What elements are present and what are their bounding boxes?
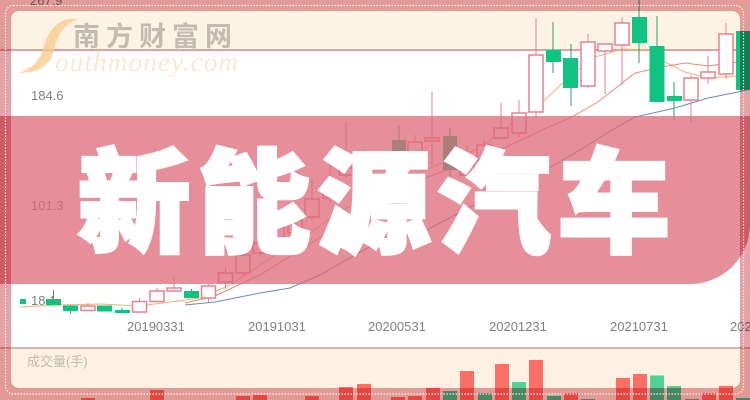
title: 新能源汽车 [78, 142, 670, 267]
axis labels: 184.6 [31, 88, 64, 103]
upper cream chart band [0, 0, 750, 51]
axis labels: 20201231 [489, 319, 547, 334]
title band [0, 116, 750, 284]
axis labels: 18.1 [31, 293, 56, 308]
watermark chinese name: 南方财富网 [73, 21, 238, 52]
axis labels: 20200531 [368, 319, 426, 334]
moving average lines [20, 49, 750, 307]
candlesticks: falling [20, 0, 750, 314]
axis labels: 20191031 [248, 319, 306, 334]
lower cream volume band [0, 347, 750, 400]
volume bars: falling [443, 376, 750, 400]
watermark: southmoney logo [18, 19, 239, 77]
axis labels: 20210731 [610, 319, 668, 334]
axis labels: 101.3 [31, 198, 64, 213]
volume bars: rising [81, 360, 733, 400]
icon: swoosh S [18, 19, 78, 73]
watermark latin name: outhmoney.com [55, 47, 239, 77]
axis labels: 20190331 [127, 319, 185, 334]
volume axis label: 成交量(手) [27, 354, 88, 369]
candlesticks: rising [81, 17, 733, 313]
